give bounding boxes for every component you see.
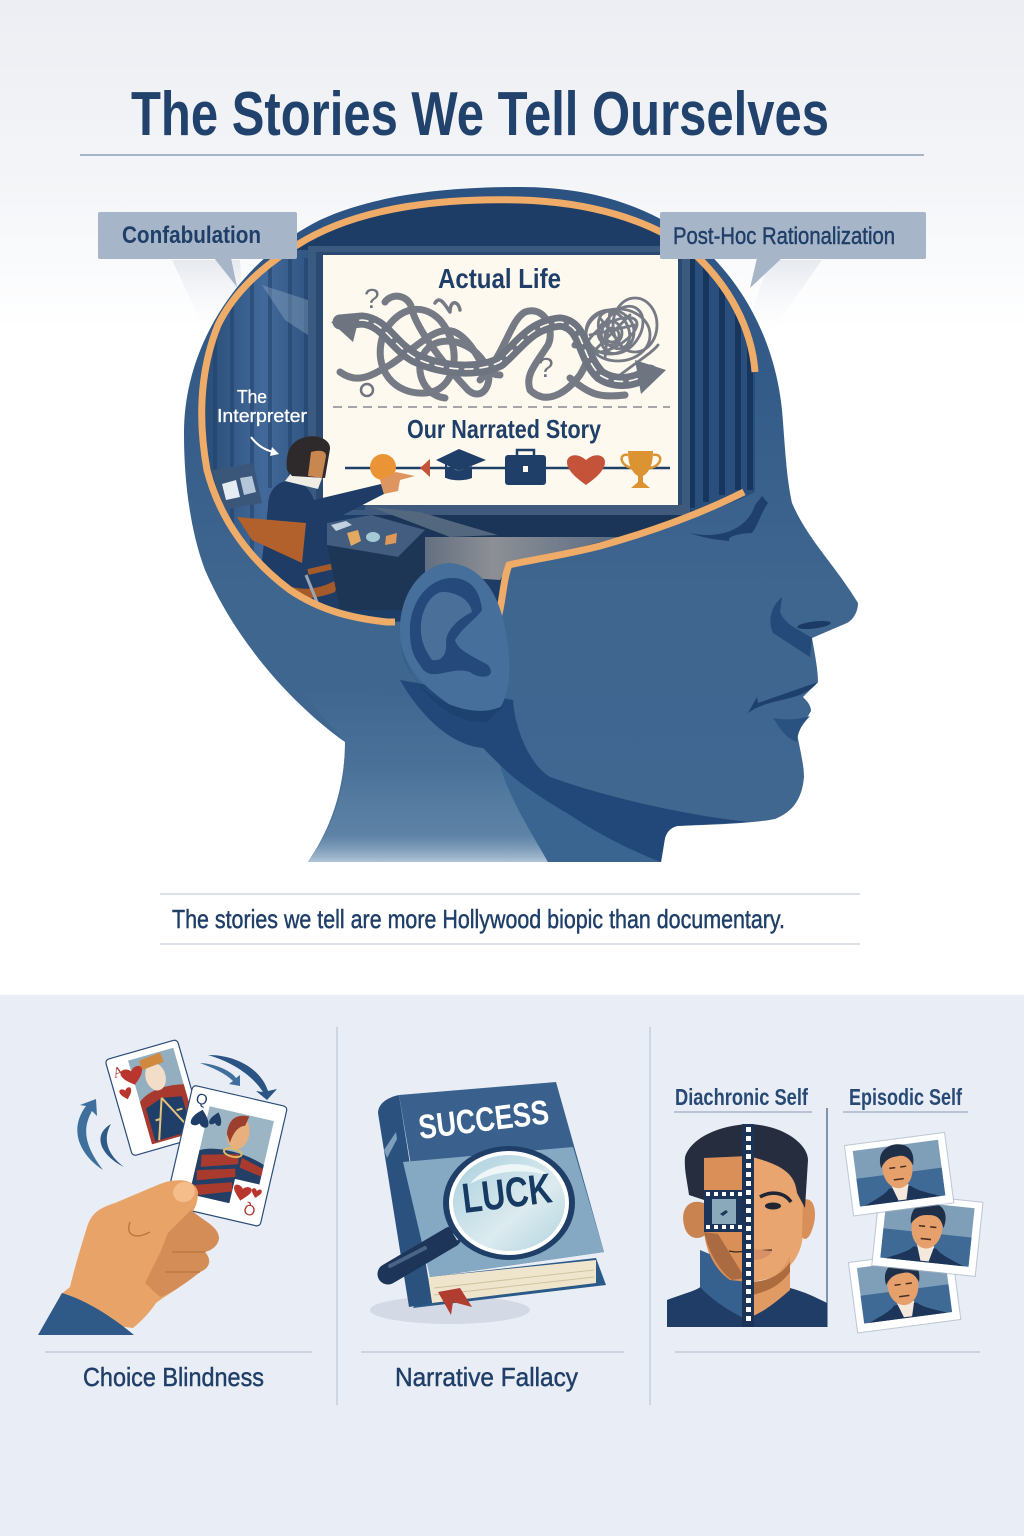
timeline (345, 449, 670, 488)
interpreter label: Interpreter (217, 406, 307, 426)
panel: choice blindness (38, 1039, 312, 1392)
bookmark (438, 1288, 472, 1315)
orange circle (370, 454, 396, 480)
queen card (165, 1085, 288, 1227)
panel: self comparison (667, 1084, 984, 1352)
title: success: SUCCESS (416, 1093, 551, 1147)
bottom panel (0, 995, 1024, 1536)
callout: post-hoc rationalization: Post-Hoc Rationalization (673, 223, 895, 250)
word: luck: LUCK (459, 1164, 554, 1222)
heading: diachronic self: Diachronic Self (675, 1084, 808, 1110)
trophy (622, 451, 660, 488)
jaw mid band (500, 765, 661, 862)
briefcase (505, 450, 546, 485)
film frame eye (704, 1190, 748, 1232)
question marks (361, 283, 554, 396)
graduation cap (436, 449, 486, 480)
callout: post-hoc rationalization (660, 212, 926, 288)
head cutaway illustration (184, 187, 858, 862)
pointing hand (380, 472, 415, 494)
road arrowheads (331, 314, 666, 394)
heading: episodic self: Episodic Self (849, 1084, 962, 1110)
shirt collar (285, 474, 322, 489)
label: choice blindness: Choice Blindness (83, 1362, 264, 1392)
jaw shadow (400, 680, 750, 862)
title: The Stories We Tell Ourselves (131, 80, 829, 149)
book (378, 1082, 606, 1308)
queen card: Q (194, 1090, 209, 1109)
panel: narrative fallacy (361, 1082, 624, 1392)
side control panel (212, 463, 262, 510)
tagline: The stories we tell are more Hollywood biopic than documentary. (172, 904, 785, 934)
neck highlight fade (308, 770, 548, 862)
question marks: ? (538, 352, 554, 383)
book shadow (370, 1296, 530, 1324)
heading: our narrated story: Our Narrated Story (407, 414, 601, 444)
interior scene (190, 190, 770, 630)
screen (323, 255, 678, 505)
callout: confabulation: Confabulation (122, 222, 261, 249)
question marks: ? (364, 283, 380, 314)
right half skin (748, 1152, 803, 1282)
left half skin (704, 1155, 748, 1282)
stage floor (368, 515, 682, 537)
stubble (704, 1232, 745, 1280)
ace card: A (111, 1064, 126, 1082)
head (287, 436, 330, 478)
ace card (105, 1039, 205, 1156)
screen frame (308, 246, 690, 515)
label: narrative fallacy: Narrative Fallacy (395, 1362, 578, 1392)
callout wedges (172, 260, 822, 340)
control console (327, 515, 425, 610)
split portrait (667, 1124, 827, 1327)
ears (802, 1199, 815, 1239)
heading: actual life: Actual Life (438, 263, 561, 294)
hair (685, 1124, 808, 1208)
page background (0, 0, 1024, 330)
neck lower tone (300, 690, 548, 862)
suit (262, 481, 384, 615)
face details (690, 496, 831, 742)
ear (400, 563, 510, 722)
head silhouette (184, 187, 858, 862)
snapshot photos (844, 1132, 984, 1334)
heart (567, 455, 605, 485)
swap arrows (77, 1055, 277, 1170)
interpreter label: The (237, 387, 267, 407)
magnifier (388, 1146, 575, 1274)
film strip (742, 1124, 754, 1327)
hand (60, 1179, 219, 1328)
interpreter label (217, 387, 307, 456)
queen card: Q (242, 1200, 257, 1219)
interpreter figure (262, 436, 415, 615)
red arrow (420, 459, 430, 477)
cutaway rim (202, 200, 755, 622)
chair (237, 517, 336, 602)
sleeve (38, 1293, 134, 1335)
tangled road (340, 296, 658, 398)
eye and brow (760, 1193, 791, 1202)
callout: confabulation (98, 212, 297, 287)
curtains (190, 250, 762, 620)
